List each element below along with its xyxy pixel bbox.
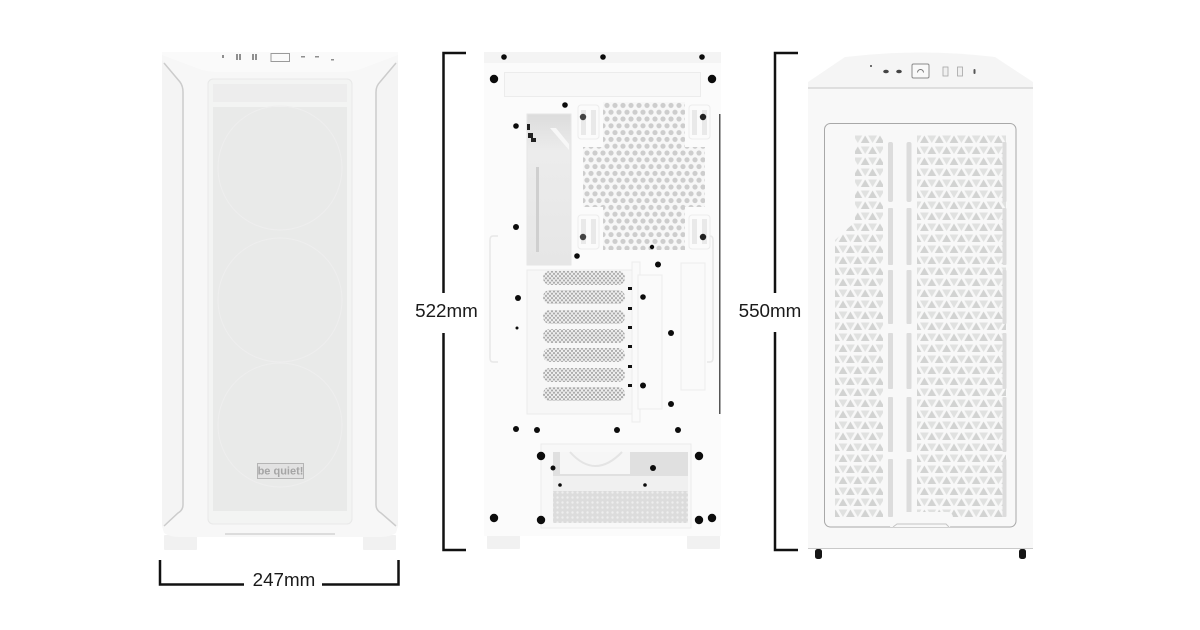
side window opening [527, 114, 571, 265]
rear edge shadow [719, 114, 720, 414]
top band [162, 52, 398, 72]
side case body [808, 88, 1033, 549]
mesh left section [835, 133, 883, 517]
dimension: height 522mm [415, 53, 478, 550]
expansion slot vents [543, 271, 625, 401]
mesh area [213, 107, 347, 511]
mesh right section [917, 134, 1006, 517]
front case body [162, 52, 398, 537]
mesh top strip [213, 84, 347, 102]
top strip [484, 52, 721, 63]
curved top cap [808, 52, 1033, 88]
rear view of case [484, 52, 721, 549]
side view of case [808, 52, 1033, 559]
left side strip [162, 60, 183, 526]
bottom edge [808, 548, 1033, 549]
rear fan vent [583, 102, 705, 250]
expansion slot latches [628, 287, 632, 387]
fan mount slot bars [581, 110, 707, 244]
right side strip [376, 60, 398, 526]
PSU bay opening [553, 452, 688, 523]
top IO controls [870, 64, 976, 78]
fan mount slots [578, 105, 710, 249]
top cap seam [808, 88, 1033, 89]
front IO controls [222, 54, 334, 62]
expansion slot bracket [527, 270, 632, 414]
front view of case [162, 52, 398, 550]
cover plates [632, 262, 705, 422]
front feet [164, 535, 396, 550]
vertical slots [888, 142, 1006, 517]
intake fans [218, 106, 342, 487]
screws [490, 54, 716, 524]
side panel frame [824, 124, 1016, 527]
rear case body [484, 52, 721, 536]
front panel frame [208, 79, 352, 524]
panel pull tab [890, 512, 953, 527]
castor feet [815, 549, 1026, 559]
dimension: width 247mm: 247mm [253, 569, 315, 590]
tab outline [893, 524, 949, 527]
bottom lip [225, 533, 335, 535]
dimension: height 550mm: 550mm [739, 300, 801, 321]
dimension: height 522mm: 522mm [415, 300, 478, 321]
dimension: width 247mm [160, 560, 398, 590]
side slot lines [164, 63, 396, 526]
rear feet [487, 535, 720, 549]
brand logo: be quiet! [258, 466, 303, 478]
PSU bay frame [541, 444, 691, 528]
side handles [490, 236, 713, 362]
top rectangular recess [504, 72, 700, 96]
dimension: height 550mm [739, 53, 801, 550]
